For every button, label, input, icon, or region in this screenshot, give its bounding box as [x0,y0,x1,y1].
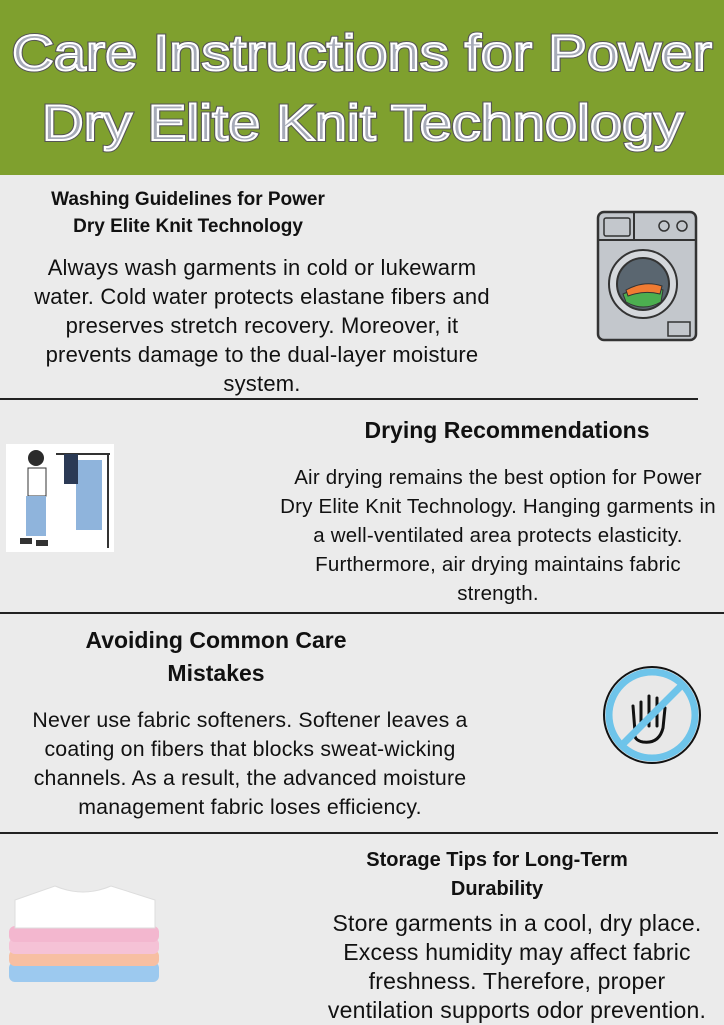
section 2 body [280,466,716,605]
title: Dry Elite Knit Technology [42,95,683,151]
section 2 body: Furthermore, air drying maintains fabric [315,553,681,576]
icon: stack of shirts [9,886,159,982]
icon: washing machine [596,210,698,342]
section 4 heading [366,849,628,900]
section 1 heading: Washing Guidelines for Power [51,189,325,210]
section 2 body: a well-ventilated area protects elasticity. [313,524,683,547]
section 1 body: Always wash garments in cold or lukewarm [48,255,476,280]
section 1 heading [51,189,325,237]
header banner [0,0,724,175]
section 3 body [32,708,468,819]
title: Care Instructions for Power [12,25,712,81]
section 1 body [34,255,490,396]
section 4 heading: Storage Tips for Long-Term [366,849,628,871]
title: Dry Elite Knit Technology [42,95,683,151]
section 3 heading [85,627,347,686]
section 1 heading: Dry Elite Knit Technology [73,216,303,237]
section 1 body: water. Cold water protects elastane fibers and [34,284,490,309]
icon: woman hanging jeans [6,444,114,552]
section 3 heading: Mistakes [167,660,265,686]
section 1 body: preserves stretch recovery. Moreover, it [66,313,458,338]
section 3 body: coating on fibers that blocks sweat-wicking [44,737,456,761]
section 1 body: prevents damage to the dual-layer moisture [46,342,478,367]
section 2 body: Dry Elite Knit Technology. Hanging garments in [280,495,716,518]
section 3 body: Never use fabric softeners. Softener leaves a [32,708,468,732]
section 4 body: ventilation supports odor prevention. [328,997,706,1023]
title: Care Instructions for Power [12,25,712,81]
section 3 body: channels. As a result, the advanced moisture [34,766,466,790]
section 2 body: Air drying remains the best option for Power [294,466,702,489]
section 1 body: system. [223,371,301,396]
section 4 heading: Durability [451,878,543,900]
title [12,25,714,152]
section 4 body [328,910,706,1023]
section 4 body: freshness. Therefore, proper [369,968,665,994]
section 2 body: strength. [457,582,539,605]
section 3 body: management fabric loses efficiency. [78,795,422,819]
section 4 body: Excess humidity may affect fabric [343,939,691,965]
icon: no hand sign [603,666,701,764]
section 4 body: Store garments in a cool, dry place. [332,910,702,936]
section 2 heading: Drying Recommendations [364,417,650,443]
section 3 heading: Avoiding Common Care [85,627,347,653]
